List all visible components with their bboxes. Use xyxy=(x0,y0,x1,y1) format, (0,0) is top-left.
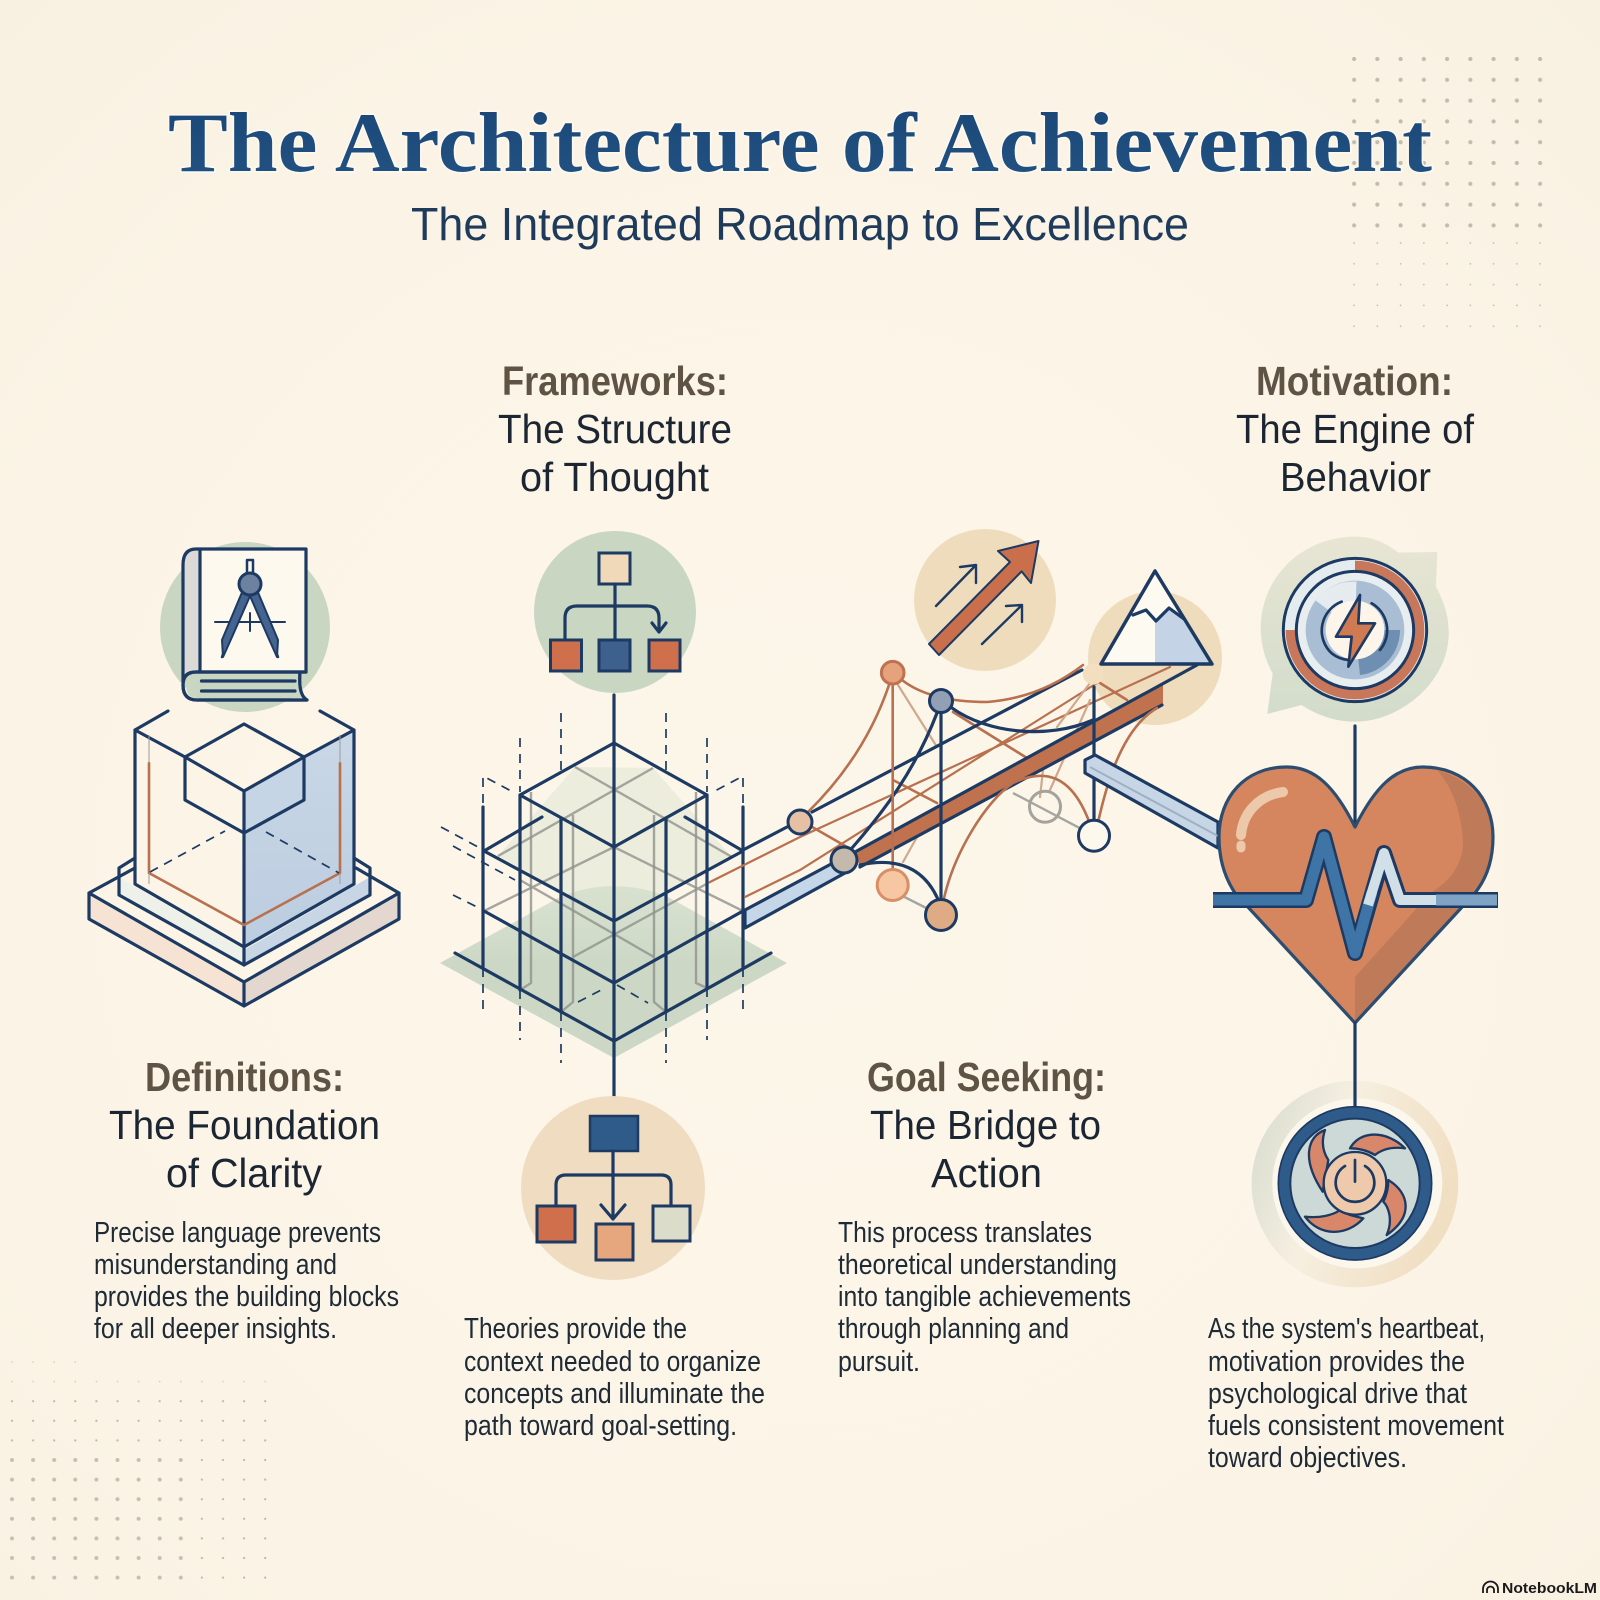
icon: energy gauge in speech bubble xyxy=(1261,537,1449,722)
text block: frameworks: Theories provide the xyxy=(464,1313,687,1345)
heading: definitions: of Clarity xyxy=(166,1150,322,1196)
text block: frameworks: context needed to organize xyxy=(464,1346,761,1378)
text block: goal seeking xyxy=(838,1217,1131,1378)
text block: frameworks: concepts and illuminate the xyxy=(464,1378,765,1410)
text block: goal seeking: This process translates xyxy=(838,1217,1092,1249)
text block: goal seeking: pursuit. xyxy=(838,1346,920,1378)
heading: definitions: Definitions: xyxy=(145,1054,344,1100)
icon: book with compass xyxy=(160,542,330,712)
icon: mountain peak xyxy=(1088,571,1222,725)
text block: motivation xyxy=(1208,1313,1504,1474)
text block: frameworks xyxy=(464,1313,765,1442)
text block: definitions xyxy=(94,1217,399,1345)
connector beam to heart xyxy=(1085,755,1218,848)
dot pattern: top right xyxy=(1342,49,1552,337)
heading: motivation: Behavior xyxy=(1280,454,1431,500)
subtitle: The Integrated Roadmap to Excellence xyxy=(411,198,1189,250)
icon: power turbine xyxy=(1252,1081,1458,1287)
connector line: frameworks xyxy=(612,695,616,1096)
icon: isometric pedestal with cube xyxy=(89,711,399,1006)
panel: goal seeking xyxy=(710,529,1222,1378)
text block: motivation: motivation provides the xyxy=(1208,1346,1465,1378)
text block: definitions: for all deeper insights. xyxy=(94,1313,337,1345)
text block: goal seeking: through planning and xyxy=(838,1313,1069,1345)
heading: frameworks xyxy=(498,358,732,500)
heading: motivation: The Engine of xyxy=(1236,406,1475,452)
text block: definitions: provides the building blocks xyxy=(94,1281,399,1313)
heading: motivation: Motivation: xyxy=(1256,358,1453,404)
heading: frameworks: Frameworks: xyxy=(502,358,728,404)
icon: hierarchy chart top xyxy=(534,531,696,693)
connector line: heart to power icon xyxy=(1353,1023,1357,1106)
icon: hierarchy chart bottom xyxy=(521,1096,705,1280)
heading: goal seeking xyxy=(867,1054,1106,1196)
text block: definitions: misunderstanding and xyxy=(94,1249,337,1281)
icon: heart with pulse line xyxy=(1213,767,1498,1023)
text block: motivation: fuels consistent movement xyxy=(1208,1410,1504,1442)
text block: motivation: psychological drive that xyxy=(1208,1378,1467,1410)
text block: frameworks: path toward goal-setting. xyxy=(464,1410,737,1442)
dot pattern: bottom left xyxy=(2,1352,276,1590)
logo: NotebookLM: NotebookLM xyxy=(1502,1580,1597,1597)
diagram: isometric scaffold xyxy=(440,713,787,1063)
text block: goal seeking: into tangible achievements xyxy=(838,1281,1131,1313)
heading: frameworks: of Thought xyxy=(520,454,710,500)
heading: motivation xyxy=(1236,358,1475,500)
text block: definitions: Precise language prevents xyxy=(94,1217,381,1249)
heading: goal seeking: The Bridge to xyxy=(870,1102,1101,1148)
heading: goal seeking: Goal Seeking: xyxy=(867,1054,1106,1100)
panel: motivation xyxy=(1208,358,1504,1474)
heading: frameworks: The Structure xyxy=(498,406,732,452)
text block: motivation: toward objectives. xyxy=(1208,1442,1407,1474)
heading: definitions: The Foundation xyxy=(109,1102,380,1148)
heading: goal seeking: Action xyxy=(931,1150,1042,1196)
panel: definitions xyxy=(89,542,399,1345)
text block: motivation: As the system's heartbeat, xyxy=(1208,1313,1485,1345)
title: The Architecture of Achievement xyxy=(168,96,1432,190)
diagram: suspension bridge xyxy=(710,661,1218,930)
connector line: gauge to heart xyxy=(1353,726,1357,827)
text block: goal seeking: theoretical understanding xyxy=(838,1249,1117,1281)
icon: rising arrows xyxy=(914,529,1056,671)
heading: definitions xyxy=(109,1054,380,1196)
panel: frameworks xyxy=(440,358,787,1442)
